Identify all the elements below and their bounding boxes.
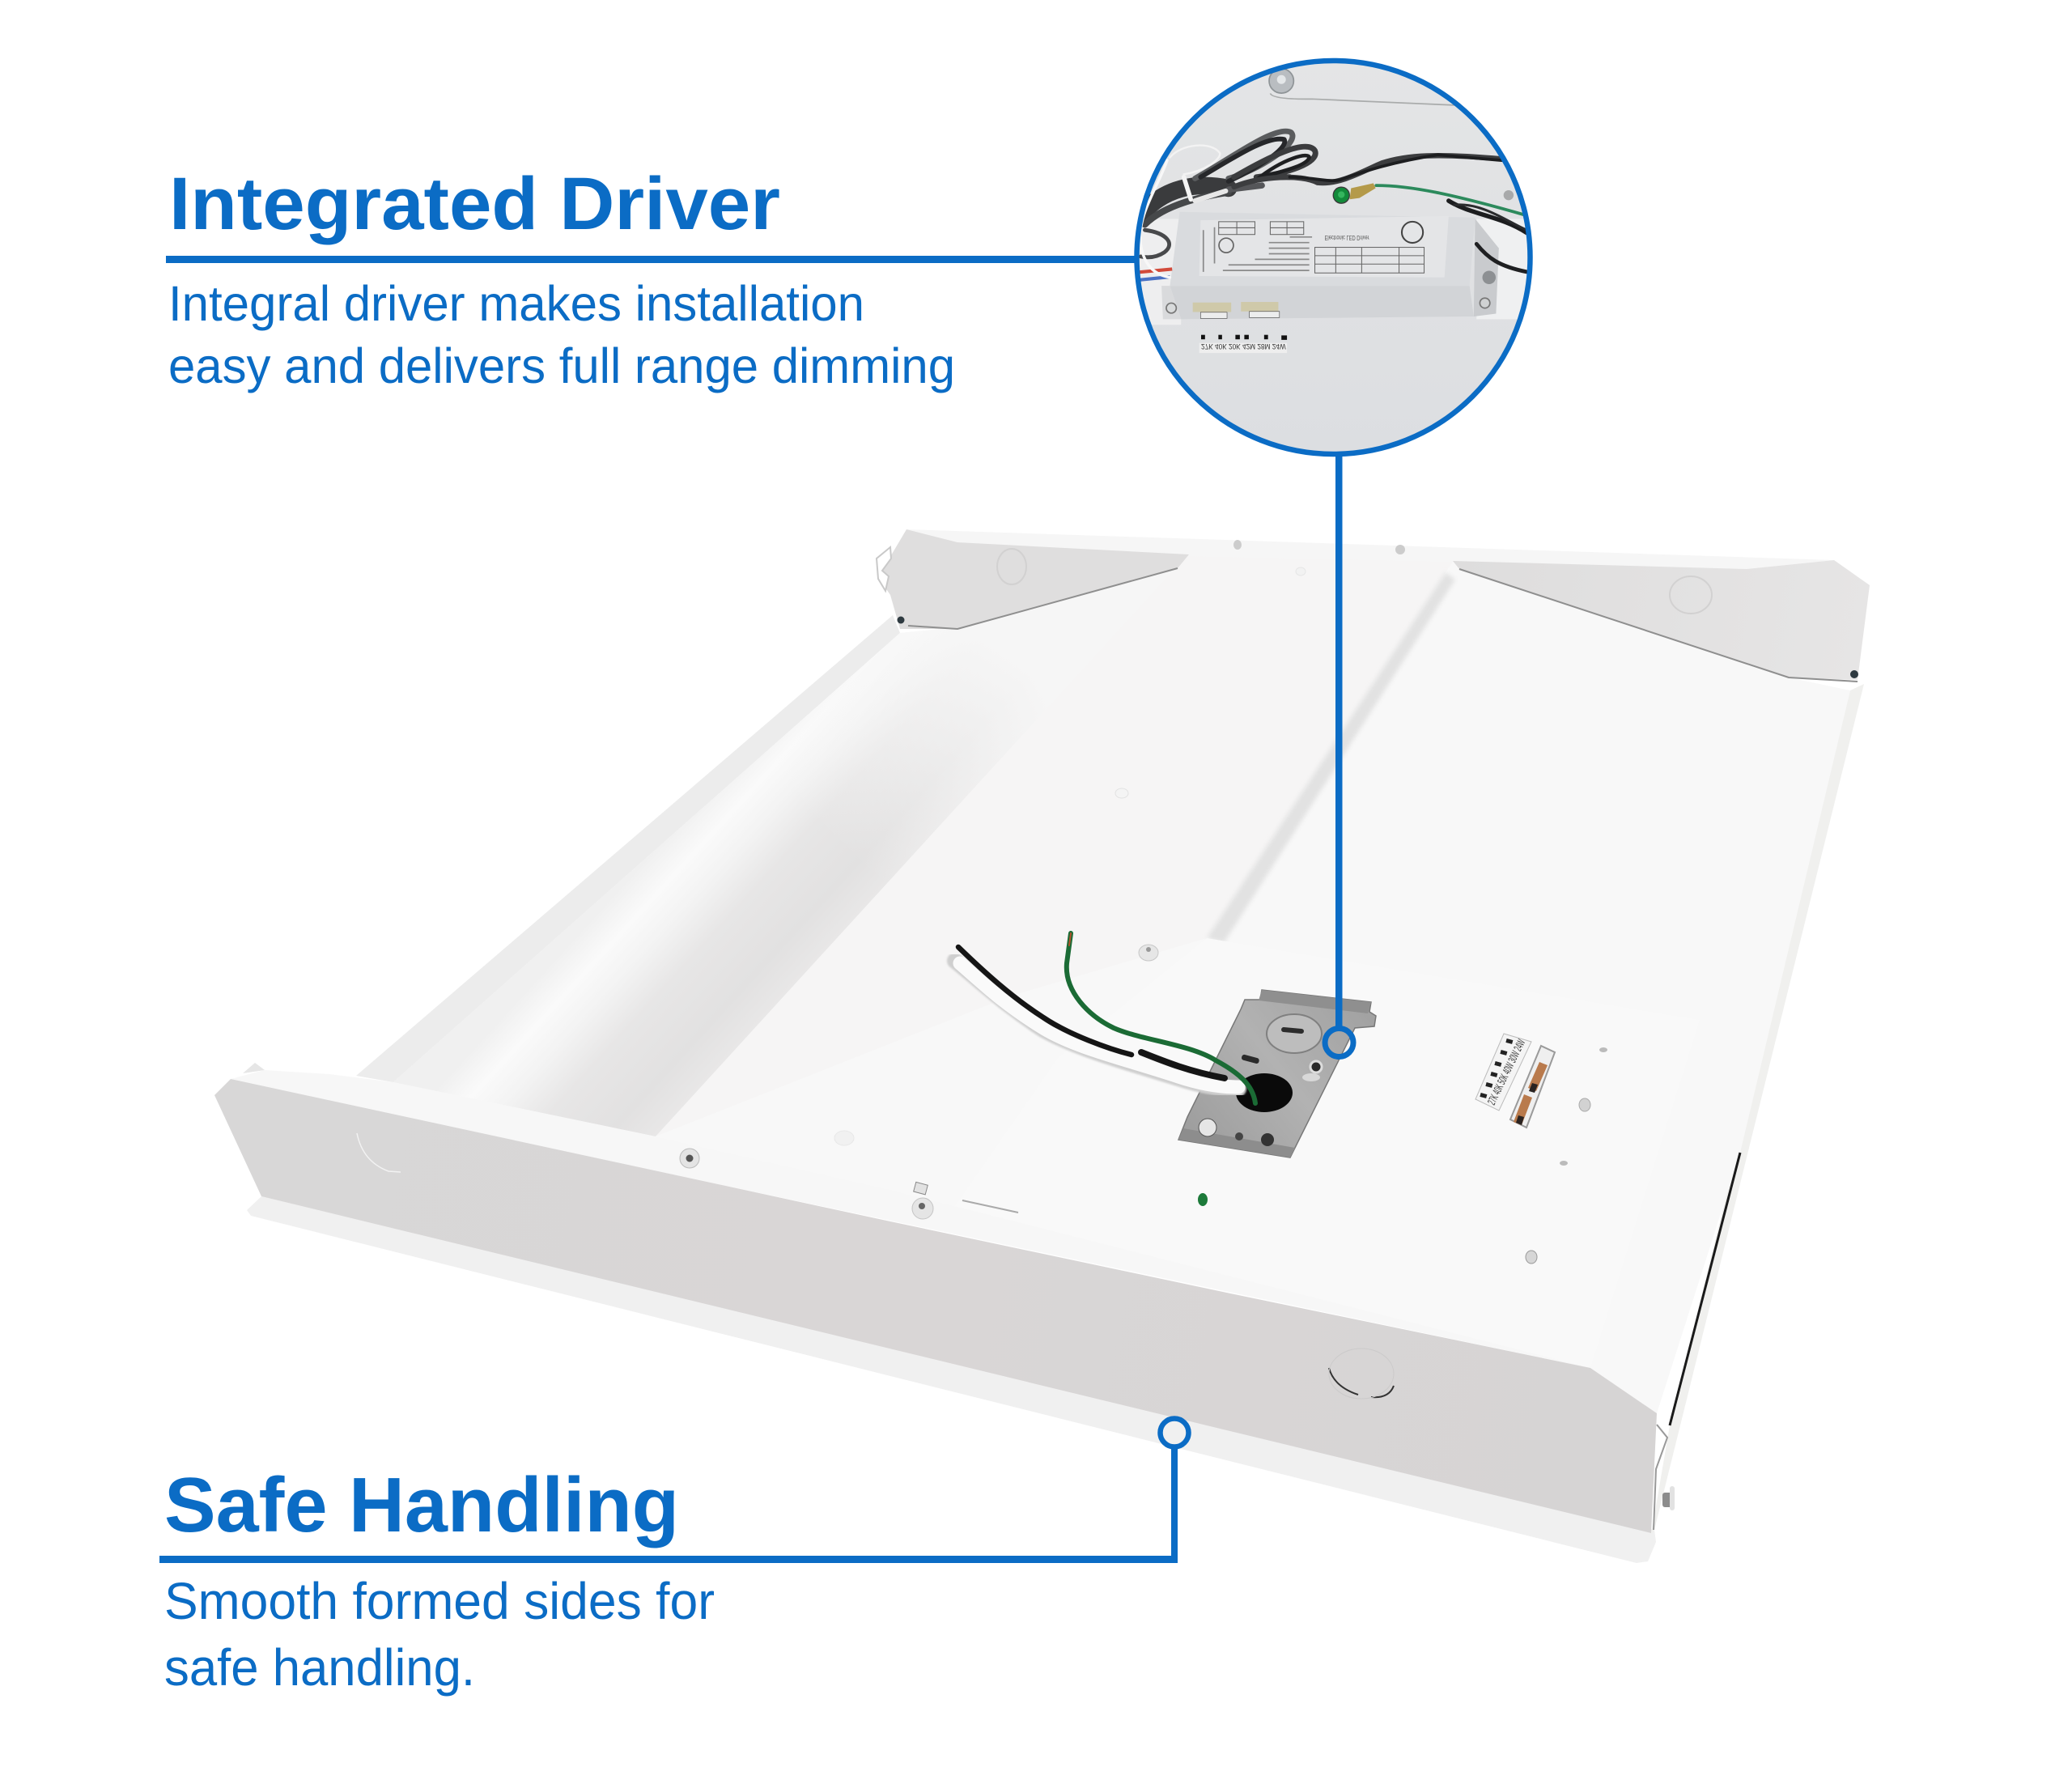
copper dimming slot [1510,1046,1555,1128]
top flange band [906,529,1834,569]
wire hole [1236,1073,1293,1112]
top right gray wall [1453,560,1870,680]
sticker tables [1219,222,1424,273]
side grommet [1504,190,1514,200]
wattage and colour label [1199,335,1287,353]
plate top lip [1259,990,1371,1013]
description: Integral driver makes installation [168,276,864,331]
driver end bracket right [1474,219,1499,316]
description: Smooth formed sides for [164,1572,715,1630]
magnified driver inset [1133,57,1535,458]
driver end bracket left [1161,286,1181,319]
body fasteners and studs [680,540,1607,1264]
corner screws [897,617,1858,678]
front left corner tab [243,1063,265,1073]
driver label sticker: 27K 40K 50K 40W 30W 24W [1484,1037,1527,1107]
incoming wires [955,933,1255,1103]
callout: Integrated Driver [166,57,1535,1057]
right side slit and bolt [1654,1153,1740,1530]
bottom flange [247,1196,1656,1563]
left background strip [1140,219,1181,325]
right bracket background [1476,219,1532,319]
slot [1281,1027,1304,1034]
driver front face [1170,286,1474,319]
description: safe handling. [164,1638,475,1697]
channel right shadow [1207,572,1455,943]
anchor ring on flange [1161,1418,1188,1447]
leader line vertical [1335,455,1342,1026]
wattage and colour label: 27K 40K 20K 42M 28M 24W [1201,342,1286,350]
callout: Safe Handling [159,1418,1188,1697]
infographic canvas [159,58,1870,1697]
product: LED panel fixture [214,529,1870,1563]
trough top highlight [648,559,1189,971]
brass ground lug [1350,183,1376,199]
description [164,1572,715,1697]
top left gray wall [878,529,1189,629]
heading: Integrated Driver: Integrated Driver [169,163,780,245]
driver connectors [1193,303,1231,312]
bracket holes [1166,303,1176,313]
heading: Safe Handling: Safe Handling [164,1462,679,1548]
round knockout [1267,1014,1322,1053]
top screw [1269,69,1293,93]
description [168,276,955,393]
anchor ring on mounting plate [1325,1028,1353,1057]
central raised channel [656,553,1453,1136]
leader line vertical [1171,1448,1178,1561]
left trough [393,559,1189,1136]
red and blue leads [1136,269,1172,273]
UL mark [1219,238,1233,253]
green ground screw [1333,187,1349,203]
driver label sticker [1475,1034,1531,1111]
front band [231,1070,1590,1368]
left wall knockout [357,1133,401,1172]
inset border [1136,61,1530,454]
mounting plate [1178,990,1376,1157]
front gray wall [214,1079,1657,1533]
lower mounting panel [955,938,1700,1368]
top wall edge shadows [908,568,1858,682]
driver top face [1170,212,1475,286]
driver sticker [1199,216,1449,278]
main body surface [393,553,1850,1413]
plate screws [1199,1119,1216,1136]
leader line horizontal [166,256,1136,263]
description: easy and delivers full range dimming [168,338,955,393]
certification logo [1402,222,1423,243]
sticker title: Electronic LED Driver [1325,234,1369,241]
right wall knockout [1329,1349,1394,1399]
wire bundle [1140,131,1526,278]
sticker text [1204,227,1312,272]
top wall knockouts [997,549,1712,614]
left mounting tab [877,547,891,591]
left side flange [356,615,900,1082]
plate bottom lip [1178,1128,1295,1157]
top seam line [1270,93,1454,105]
right side flange [1651,684,1864,1535]
leader line horizontal [159,1556,1178,1563]
